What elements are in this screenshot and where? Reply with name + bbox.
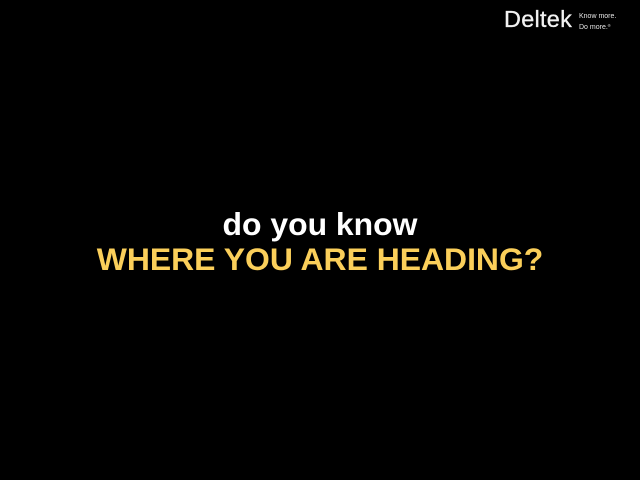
logo: Deltek Know more. Do more. (504, 6, 616, 32)
logo wordmark: Deltek (504, 6, 572, 32)
heading: do you know: do you know (223, 206, 417, 242)
logo tagline: Know more. (579, 13, 616, 20)
logo tagline: Do more.® (579, 23, 611, 31)
heading: where you are heading: WHERE YOU ARE HEADING? (97, 241, 543, 277)
logo tagline (579, 13, 616, 31)
